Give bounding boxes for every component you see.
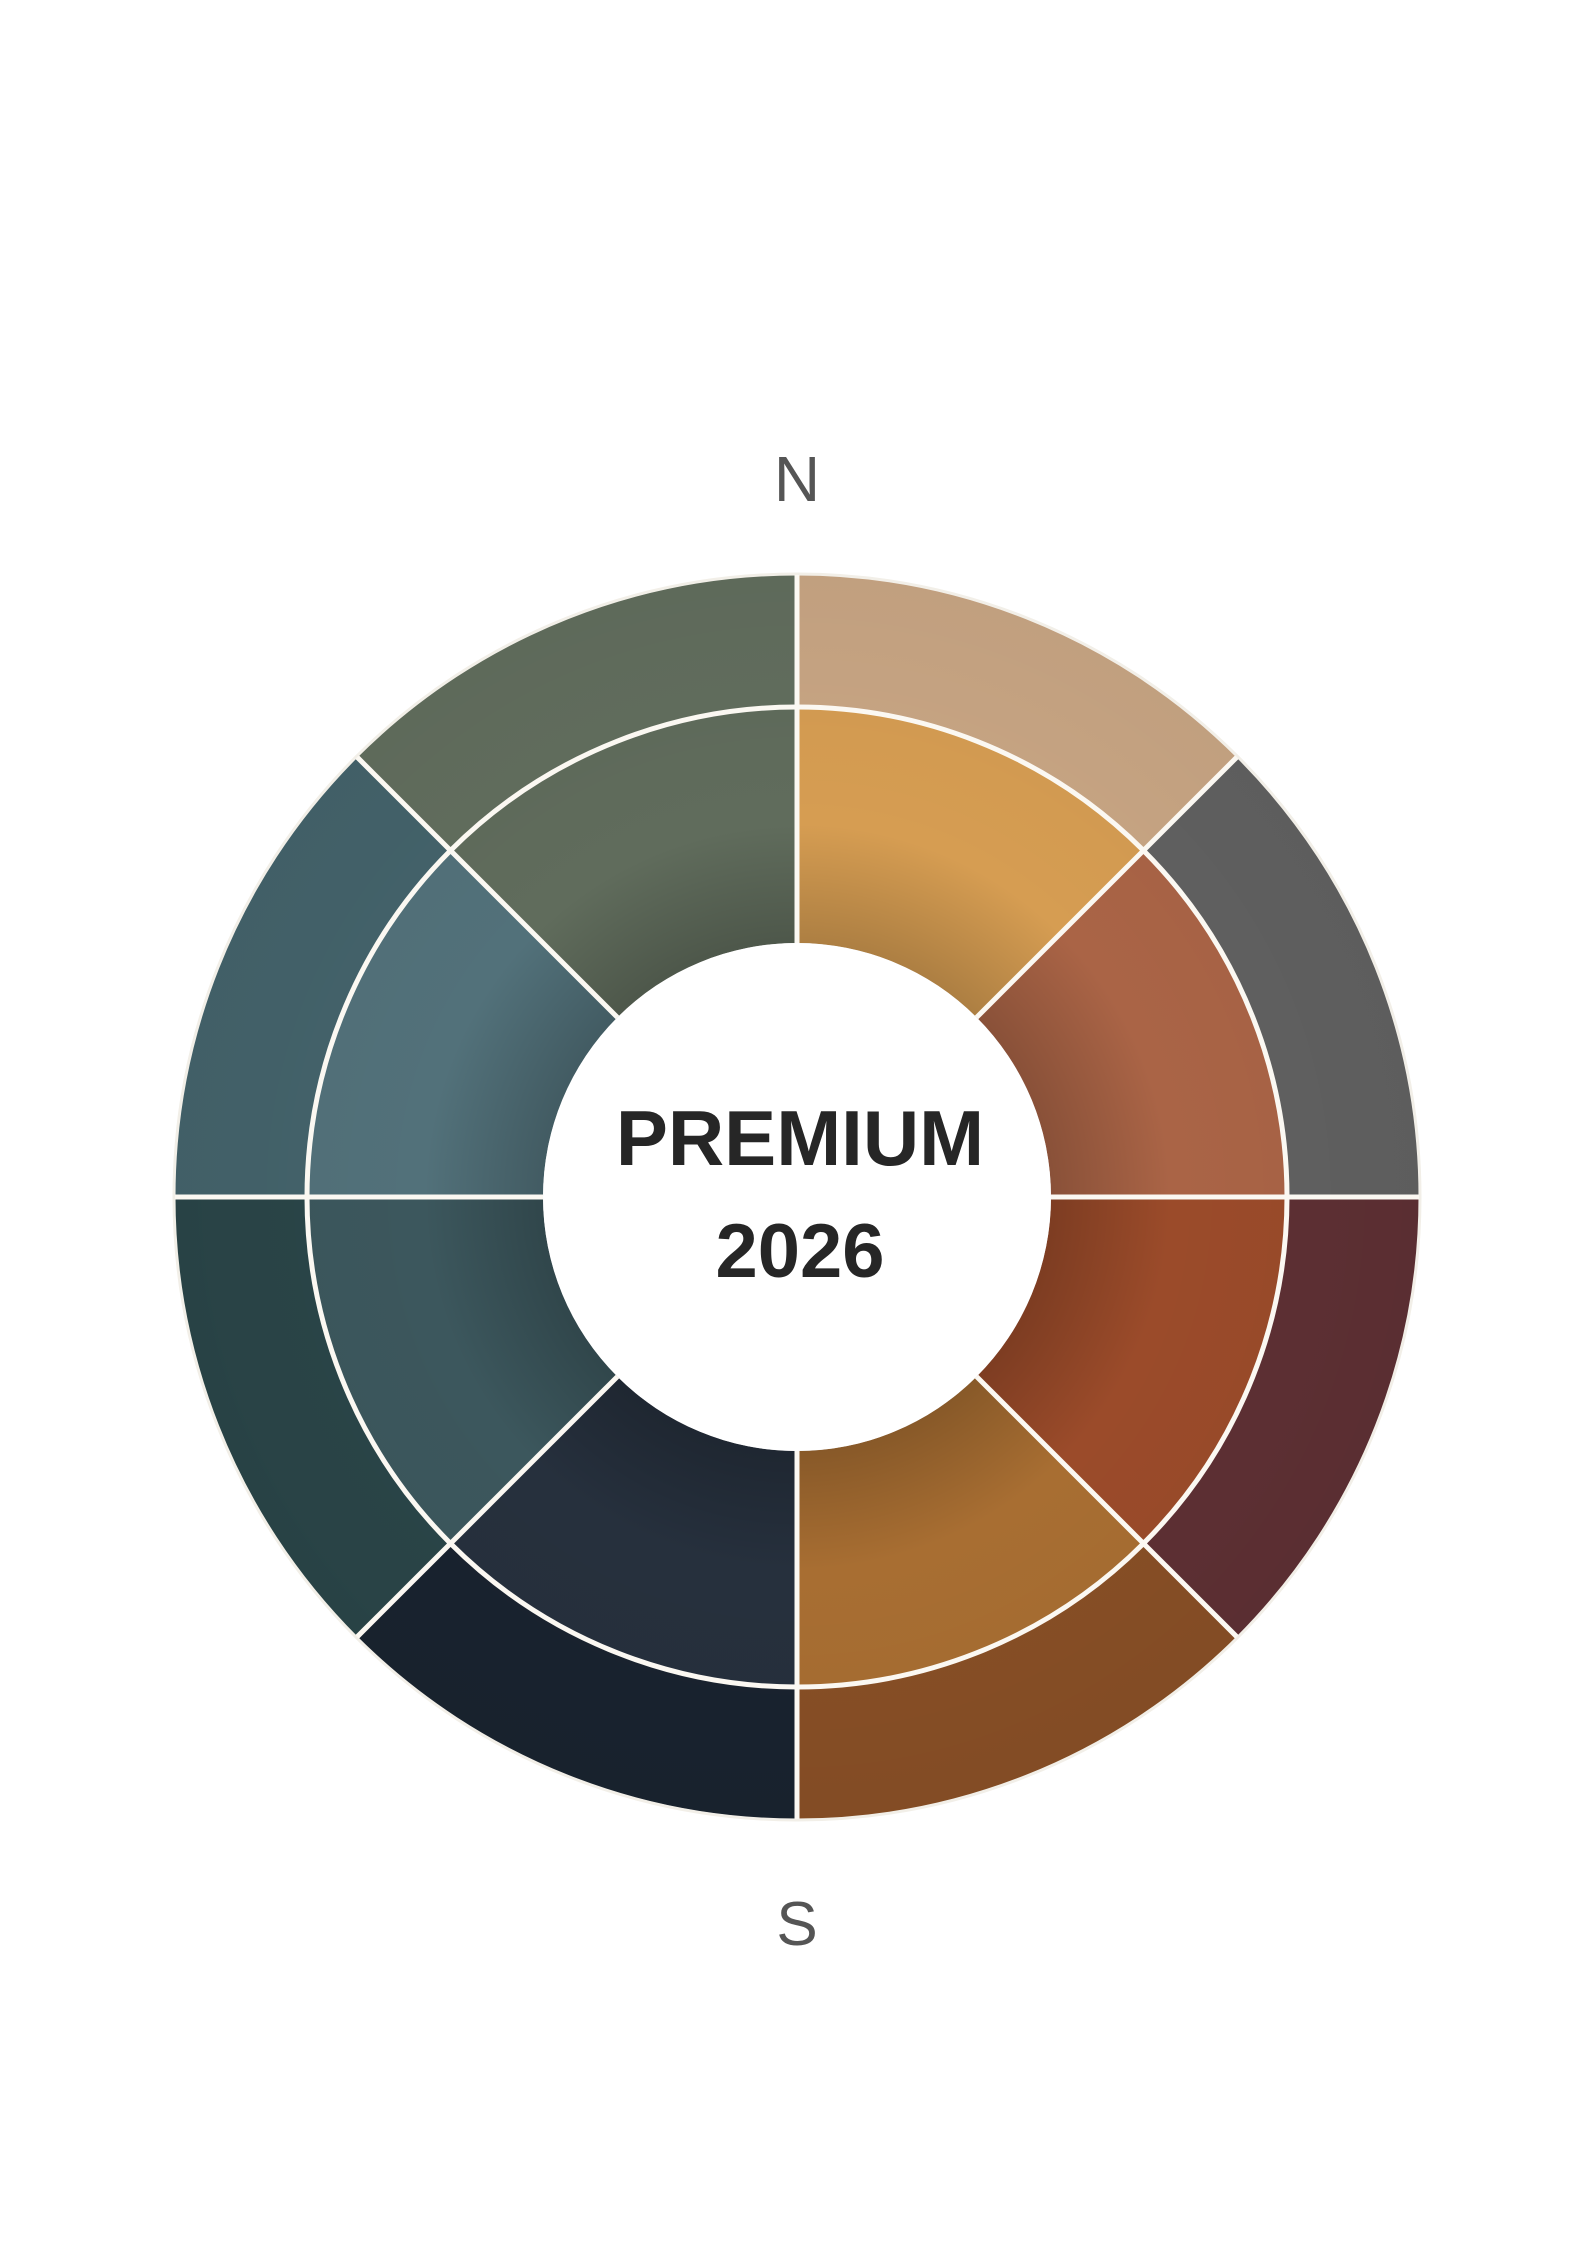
label: N: N	[774, 443, 820, 515]
outer ring segments	[175, 575, 1419, 1819]
center title: PREMIUM	[616, 1094, 984, 1182]
center title	[616, 1094, 984, 1294]
center title: 2026	[715, 1209, 885, 1294]
compass wheel	[174, 574, 1420, 1820]
inner ring segments	[307, 707, 1287, 1687]
label: S: S	[776, 1890, 818, 1959]
